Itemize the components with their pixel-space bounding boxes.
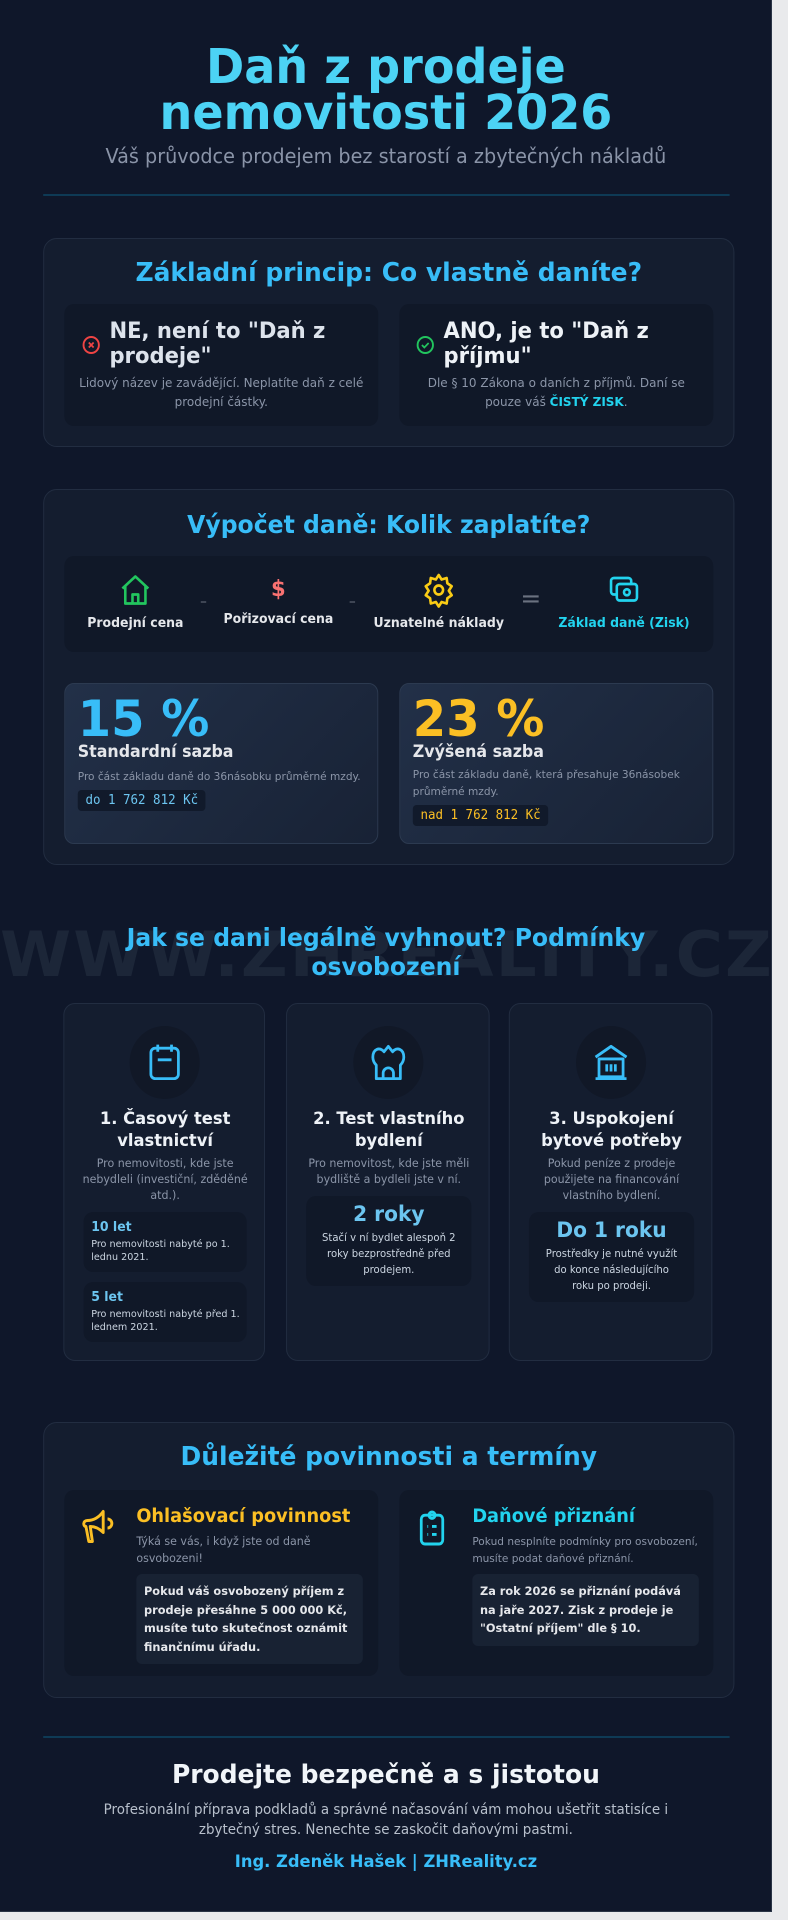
watermark: WWW.ZHREALITY.CZ	[0, 918, 772, 991]
card: 23% rate: Zvýšená sazba	[413, 742, 544, 761]
card: tax return: Za rok 2026 se přiznání podává na jaře 2027. Zisk z prodeje je "Ostatní příjem" dle § 10.	[480, 1584, 681, 1635]
card: reporting duty: Pokud váš osvobozený příjem z prodeje přesáhne 5 000 000 Kč, musíte tuto skutečnost oznámit finančnímu úřadu.	[144, 1584, 347, 1654]
card: 15% rate: Standardní sazba	[78, 742, 233, 761]
item: deductible costs	[373, 574, 504, 631]
card: tax return	[399, 1490, 713, 1676]
box: do 1 roku: Do 1 roku	[556, 1218, 667, 1242]
footer heading: Prodejte bezpečně a s jistotou	[172, 1760, 600, 1790]
card: time test: vlastnictví	[117, 1131, 213, 1151]
footer text	[104, 1802, 668, 1838]
card: 23% rate: nad 1 762 812 Kč	[420, 808, 541, 823]
footer text: Profesionální příprava podkladů a správné načasování vám mohou ušetřit statisíce i	[104, 1802, 668, 1818]
heading: obligations: Důležité povinnosti a termíny	[181, 1442, 597, 1472]
card: ANO: příjmu"	[444, 344, 532, 369]
icon: home heart	[353, 1026, 423, 1099]
title: nemovitosti 2026	[160, 85, 612, 141]
card: reporting duty: Týká se vás, i když jste od daně osvobozeni!	[136, 1534, 311, 1565]
card: 23% rate: Pro část základu daně, která přesahuje 36násobek průměrné mzdy.	[413, 768, 680, 798]
panel: tax calculation	[43, 489, 734, 865]
box: 5 let: 5 let	[91, 1290, 123, 1305]
card: own housing test	[286, 1003, 490, 1361]
card: reporting duty	[64, 1490, 378, 1676]
panel: obligations	[43, 1422, 734, 1698]
card: ANO	[399, 304, 713, 426]
item: selling price: Prodejní cena	[87, 616, 183, 631]
card: housing need: Pokud peníze z prodeje použijete na financování vlastního bydlení.	[544, 1156, 679, 1202]
card: housing need: bytové potřeby	[541, 1131, 682, 1151]
card: tax return: Daňové přiznání	[472, 1506, 635, 1527]
card: NE: prodeje"	[109, 344, 212, 369]
heading: exemption conditions: Jak se dani legálně vyhnout? Podmínky	[127, 923, 645, 952]
heading: exemption conditions: osvobození	[311, 952, 460, 981]
panel: basic principle	[43, 238, 734, 447]
card: NE	[64, 304, 378, 426]
card: 15% rate: do 1 762 812 Kč	[85, 793, 198, 808]
card: time test	[63, 1003, 265, 1361]
box: 2 roky: Stačí v ní bydlet alespoň 2 roky bezprostředně před prodejem.	[322, 1232, 456, 1276]
icon: calendar	[130, 1026, 200, 1099]
card: reporting duty: Ohlašovací povinnost	[136, 1506, 350, 1527]
formula box: =	[520, 584, 541, 614]
footer text: zbytečný stres. Nenechte se zaskočit daňovými pastmi.	[199, 1822, 573, 1838]
card: housing need	[509, 1003, 712, 1361]
card: 23% rate: 23 %	[413, 690, 544, 748]
card: ANO: ANO, je to "Daň z	[444, 319, 649, 344]
card: tax return: musíte podat daňové přiznání.	[472, 1552, 634, 1565]
box: do 1 roku	[529, 1212, 694, 1302]
item: purchase price: $	[271, 577, 286, 602]
heading: exemption conditions	[125, 923, 645, 981]
card: housing need: 3. Uspokojení	[549, 1109, 674, 1129]
card: time test: Pro nemovitosti, kde jste nebydleli (investiční, zděděné atd.).	[83, 1156, 248, 1202]
box: 2 roky	[306, 1196, 471, 1286]
title: Daň z prodeje	[206, 39, 566, 95]
card: 23% rate	[399, 683, 713, 844]
heading: basic principle: Základní princip: Co vlastně daníte?	[135, 258, 642, 288]
card: own housing test: Pro nemovitost, kde jste měli bydliště a bydleli jste v ní.	[308, 1156, 469, 1186]
box: 10 let: Pro nemovitosti nabyté po 1. lednu 2021.	[91, 1239, 230, 1263]
icon: megaphone	[82, 1510, 114, 1543]
item: tax base	[558, 576, 690, 631]
box: 10 let: 10 let	[91, 1220, 132, 1235]
card: 15% rate: 15 %	[78, 690, 209, 748]
icon: x circle	[82, 336, 100, 354]
title	[160, 39, 612, 141]
card: own housing test: bydlení	[355, 1131, 423, 1151]
box: do 1 roku: Prostředky je nutné využít do konce následujícího roku po prodeji.	[546, 1248, 677, 1292]
box: 10 let	[84, 1212, 247, 1272]
formula box: –	[200, 594, 207, 610]
item: purchase price	[224, 577, 333, 627]
formula box	[64, 556, 713, 652]
card: ANO: Dle § 10 Zákona o daních z příjmů. Daní se pouze váš ČISTÝ ZISK.	[428, 375, 685, 409]
box: 5 let	[84, 1282, 247, 1342]
item: selling price	[87, 575, 183, 631]
box: 5 let: Pro nemovitosti nabyté před 1. lednem 2021.	[91, 1309, 240, 1333]
formula box: –	[349, 594, 356, 610]
card: NE: NE, není to "Daň z	[109, 319, 325, 344]
card: 15% rate: Pro část základu daně do 36násobku průměrné mzdy.	[78, 770, 361, 783]
box: 2 roky: 2 roky	[353, 1202, 424, 1226]
subtitle: Váš průvodce prodejem bez starostí a zbytečných nákladů	[105, 144, 666, 168]
item: tax base: Základ daně (Zisk)	[558, 616, 690, 631]
card: time test: 1. Časový test	[100, 1109, 230, 1129]
card: NE: Lidový název je zavádějící. Neplatíte daň z celé prodejní částky.	[79, 375, 363, 409]
card: tax return: Pokud nesplníte podmínky pro osvobození,	[472, 1535, 698, 1548]
icon: bank	[576, 1026, 646, 1099]
item: purchase price: Pořizovací cena	[224, 612, 333, 627]
card: own housing test: 2. Test vlastního	[313, 1109, 464, 1129]
card: 15% rate	[64, 683, 378, 844]
icon: clipboard	[420, 1510, 444, 1546]
heading: calculation: Výpočet daně: Kolik zaplatíte?	[187, 510, 590, 539]
item: deductible costs: Uznatelné náklady	[373, 616, 504, 631]
footer author: Ing. Zdeněk Hašek | ZHReality.cz	[235, 1852, 537, 1872]
icon: check circle	[416, 336, 434, 354]
